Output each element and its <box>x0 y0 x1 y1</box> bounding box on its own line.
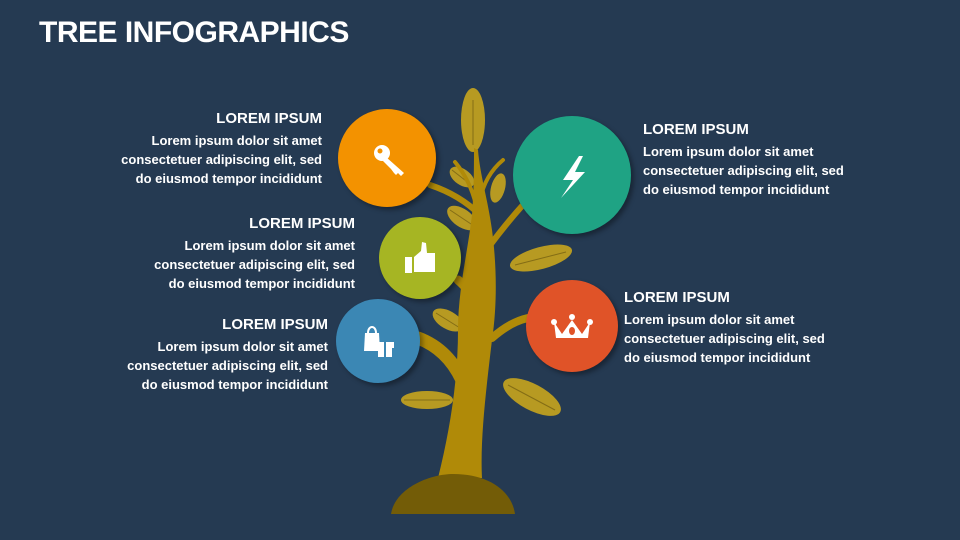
text: right 2 <box>624 289 825 365</box>
text: right 2: do eiusmod tempor incididunt <box>624 350 810 365</box>
circle: green thumbs up <box>379 217 461 299</box>
mound <box>391 474 515 514</box>
circle: orange key <box>338 109 436 207</box>
text: right 1: Lorem ipsum dolor sit amet <box>643 144 813 159</box>
trunk <box>438 148 496 478</box>
icon: thumbs up <box>405 242 435 273</box>
text: right 2: consectetuer adipiscing elit, sed <box>624 331 825 346</box>
text: left 2: LOREM IPSUM <box>249 215 355 232</box>
leaf veins <box>404 100 566 410</box>
icon: crown <box>551 314 593 338</box>
text: left 1: do eiusmod tempor incididunt <box>136 171 322 186</box>
text: left 3: LOREM IPSUM <box>222 316 328 333</box>
text: right 2: Lorem ipsum dolor sit amet <box>624 312 794 327</box>
circle: blue shopping <box>336 299 420 383</box>
text: left 3: do eiusmod tempor incididunt <box>142 377 328 392</box>
icon: key <box>374 145 404 176</box>
leaves <box>401 88 575 424</box>
text: right 2: LOREM IPSUM <box>624 289 730 306</box>
text: left 1: LOREM IPSUM <box>216 110 322 127</box>
circle: teal lightning <box>513 116 631 234</box>
circle: red crown <box>526 280 618 372</box>
text: left 1: Lorem ipsum dolor sit amet <box>152 133 322 148</box>
branches <box>418 160 528 385</box>
icon: lightning <box>561 156 585 198</box>
text: left 2: consectetuer adipiscing elit, sed <box>154 257 355 272</box>
text: left 2: Lorem ipsum dolor sit amet <box>185 238 355 253</box>
text: left 1: consectetuer adipiscing elit, sed <box>121 152 322 167</box>
text: left 2 <box>154 215 355 291</box>
text: left 3: Lorem ipsum dolor sit amet <box>158 339 328 354</box>
text: left 2: do eiusmod tempor incididunt <box>169 276 355 291</box>
text: left 3 <box>127 316 328 392</box>
text: left 1 <box>121 110 322 186</box>
text: right 1 <box>643 121 844 197</box>
text: left 3: consectetuer adipiscing elit, sed <box>127 358 328 373</box>
text: right 1: do eiusmod tempor incididunt <box>643 182 829 197</box>
text: right 1: LOREM IPSUM <box>643 121 749 138</box>
icon: bag and gift <box>364 326 394 357</box>
title: TREE INFOGRAPHICS <box>39 16 349 49</box>
text: right 1: consectetuer adipiscing elit, sed <box>643 163 844 178</box>
